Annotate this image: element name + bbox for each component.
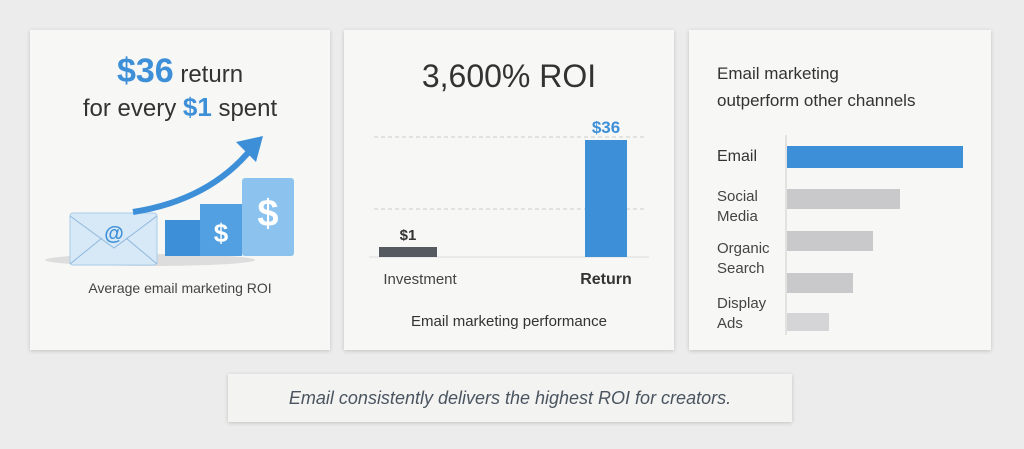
caption: Average email marketing ROI (88, 280, 272, 296)
heading: $36 return: $36 return (117, 52, 243, 90)
caption: Email marketing performance (411, 313, 607, 330)
callout banner: Email consistently delivers the highest ROI for creators. (289, 388, 731, 408)
icon: envelope with growth bars: @ (104, 223, 124, 245)
panel: channels comparison (689, 30, 991, 350)
bar chart: investment vs return (369, 120, 649, 288)
callout banner (228, 374, 792, 422)
bar chart: channels: Ads (717, 315, 743, 332)
bar chart: investment vs return: Return (580, 271, 632, 288)
bar chart: channels: Email (717, 148, 757, 165)
heading: outperform other channels (717, 91, 915, 110)
bar chart: channels (717, 135, 963, 335)
icon: envelope with growth bars: $ (214, 218, 229, 248)
heading: Email marketing (717, 64, 839, 83)
panel: left ROI (30, 30, 330, 350)
bar chart: channels: Display (717, 295, 767, 312)
bar chart: investment vs return: $1 (400, 227, 416, 244)
icon: envelope with growth bars (45, 136, 294, 266)
bar chart: channels: Search (717, 260, 765, 277)
bar chart: channels: Social (717, 188, 758, 205)
panel: 3,600% ROI bar chart (344, 30, 674, 350)
bar chart: channels: Media (717, 208, 759, 225)
icon: envelope with growth bars: $ (257, 193, 279, 235)
heading (717, 64, 915, 110)
heading: 3,600% ROI (422, 58, 596, 94)
heading: for every $1 spent: for every $1 spent (83, 92, 277, 122)
bar chart: channels: Organic (717, 240, 770, 257)
bar chart: investment vs return: Investment (383, 271, 458, 288)
